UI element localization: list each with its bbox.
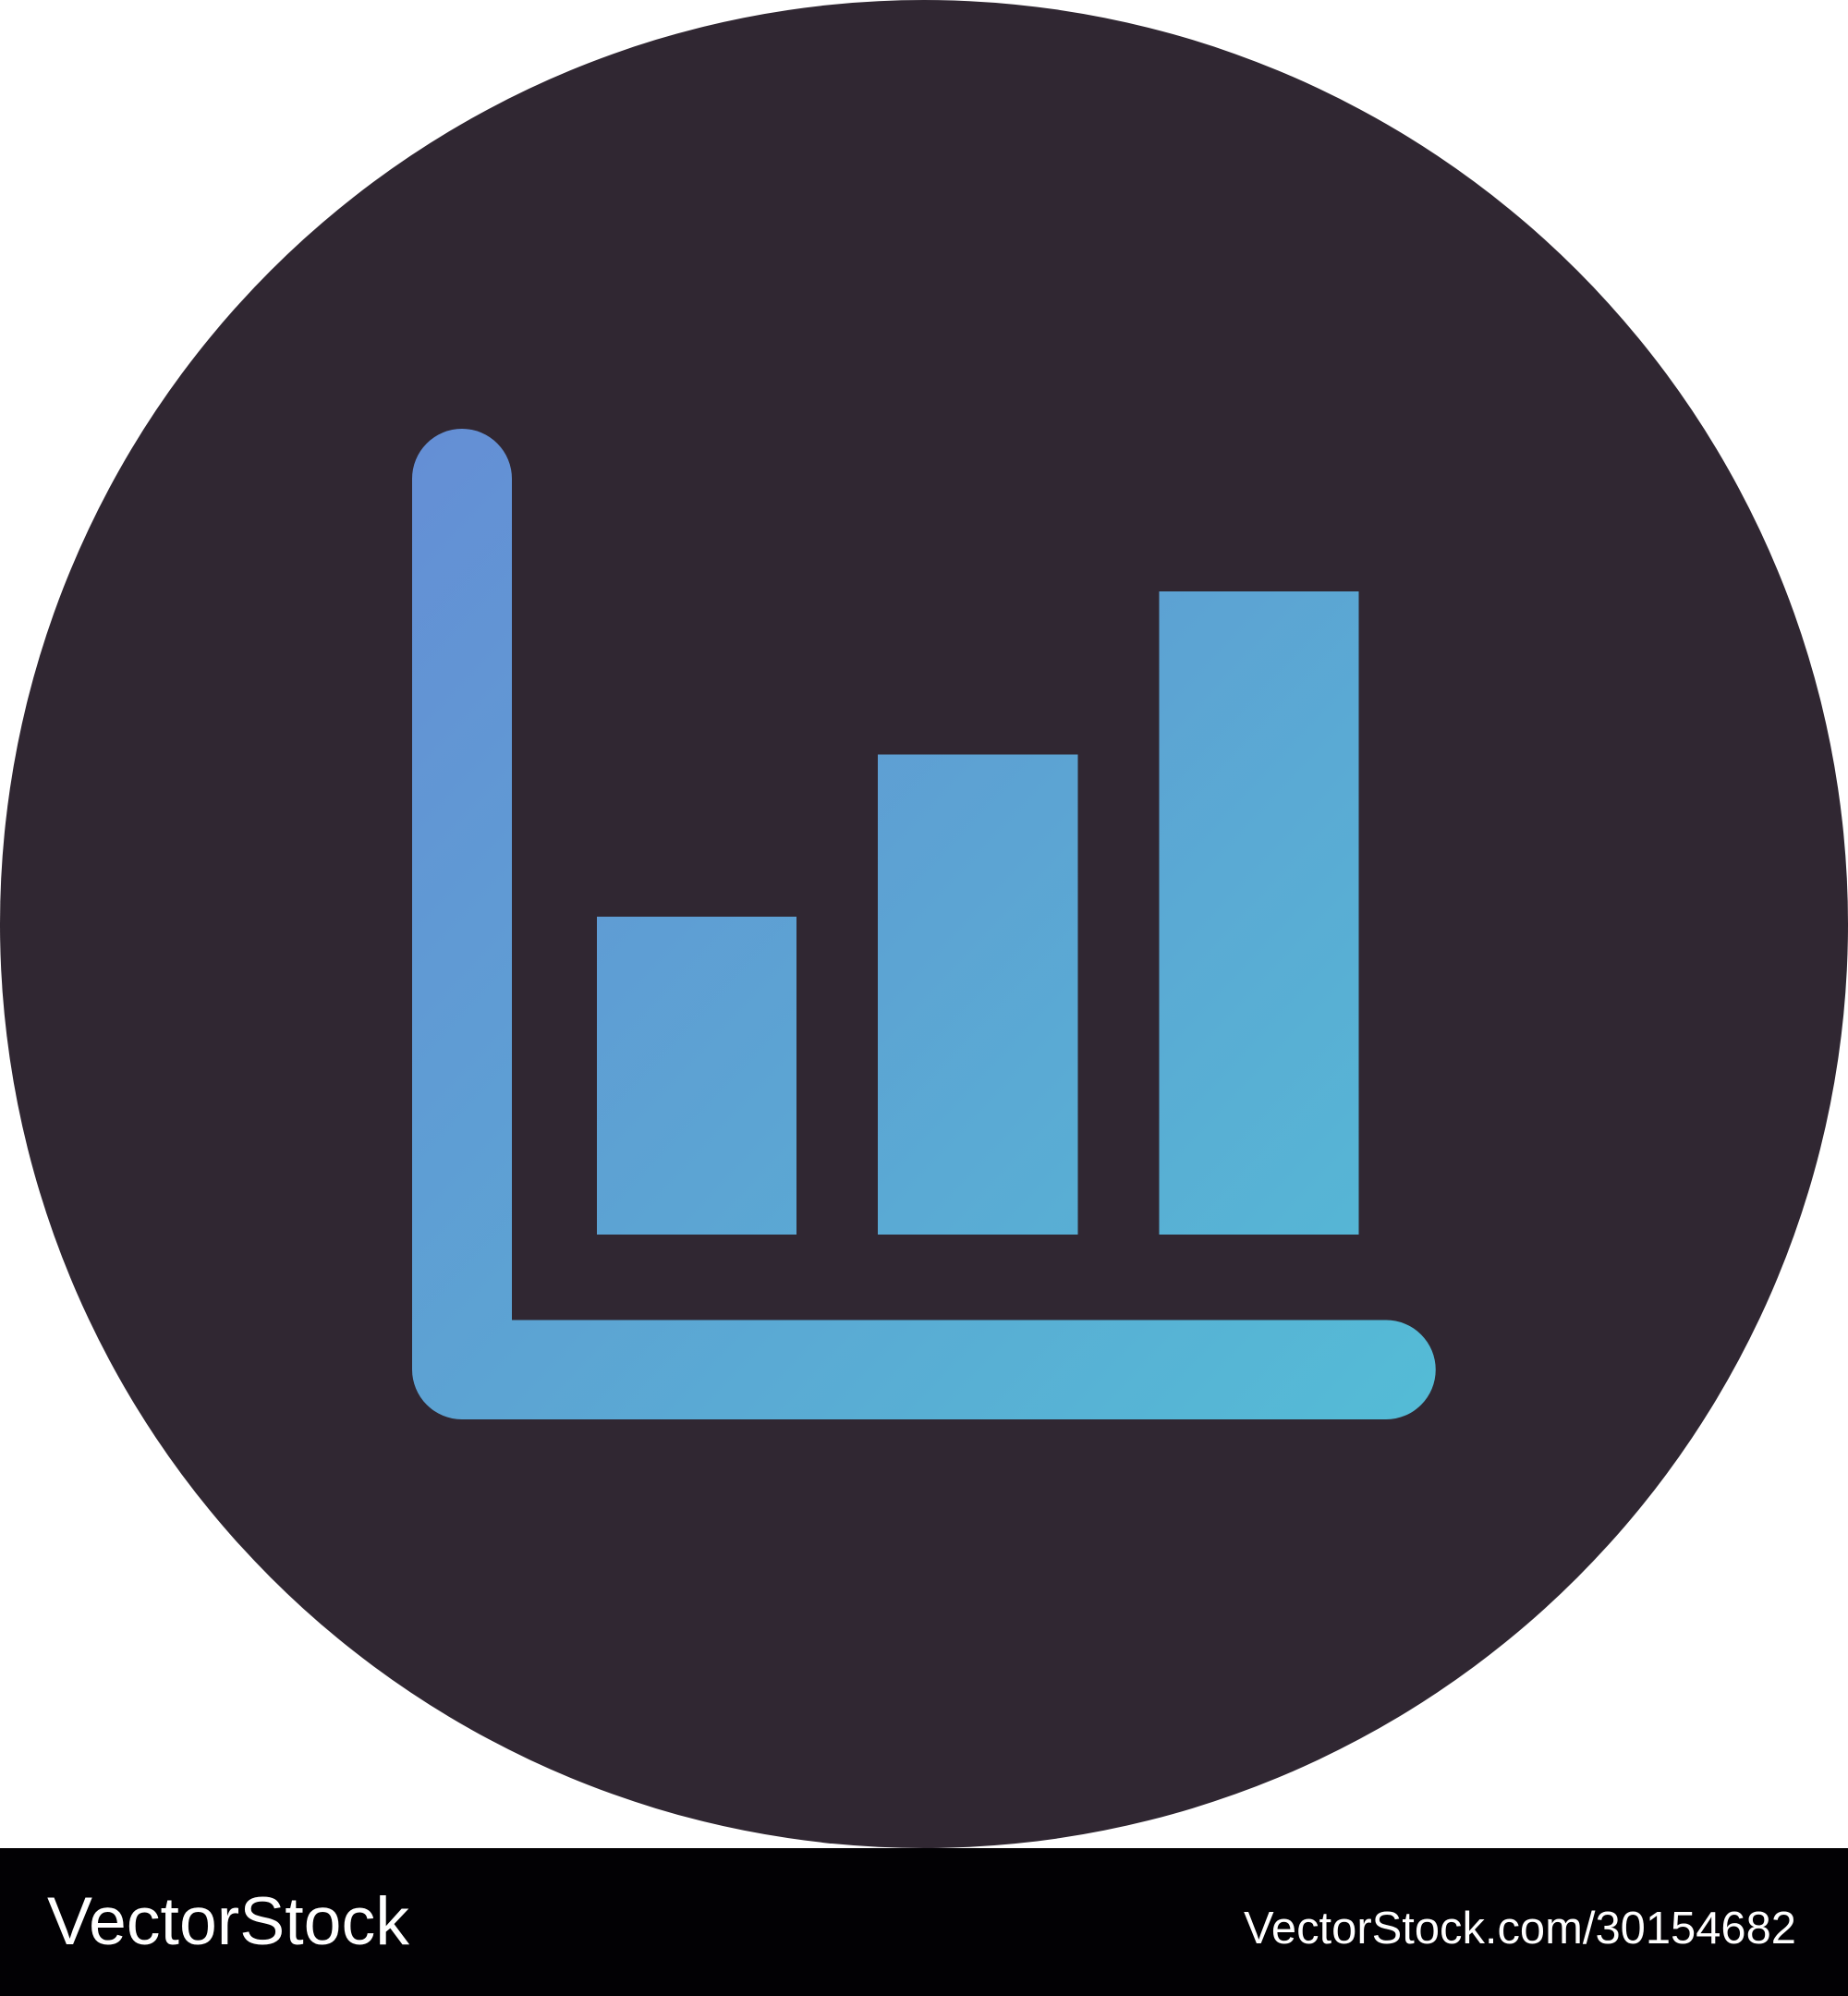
icon: bar chart	[412, 429, 1436, 1419]
footer band	[0, 1848, 1848, 1996]
brand name: VectorStock	[47, 1884, 409, 1959]
bar 1	[597, 917, 796, 1235]
image url: VectorStock.com/30154682	[1244, 1904, 1796, 1953]
bar 2	[878, 754, 1077, 1235]
chart axes	[412, 429, 1436, 1419]
bar 3	[1159, 591, 1358, 1235]
